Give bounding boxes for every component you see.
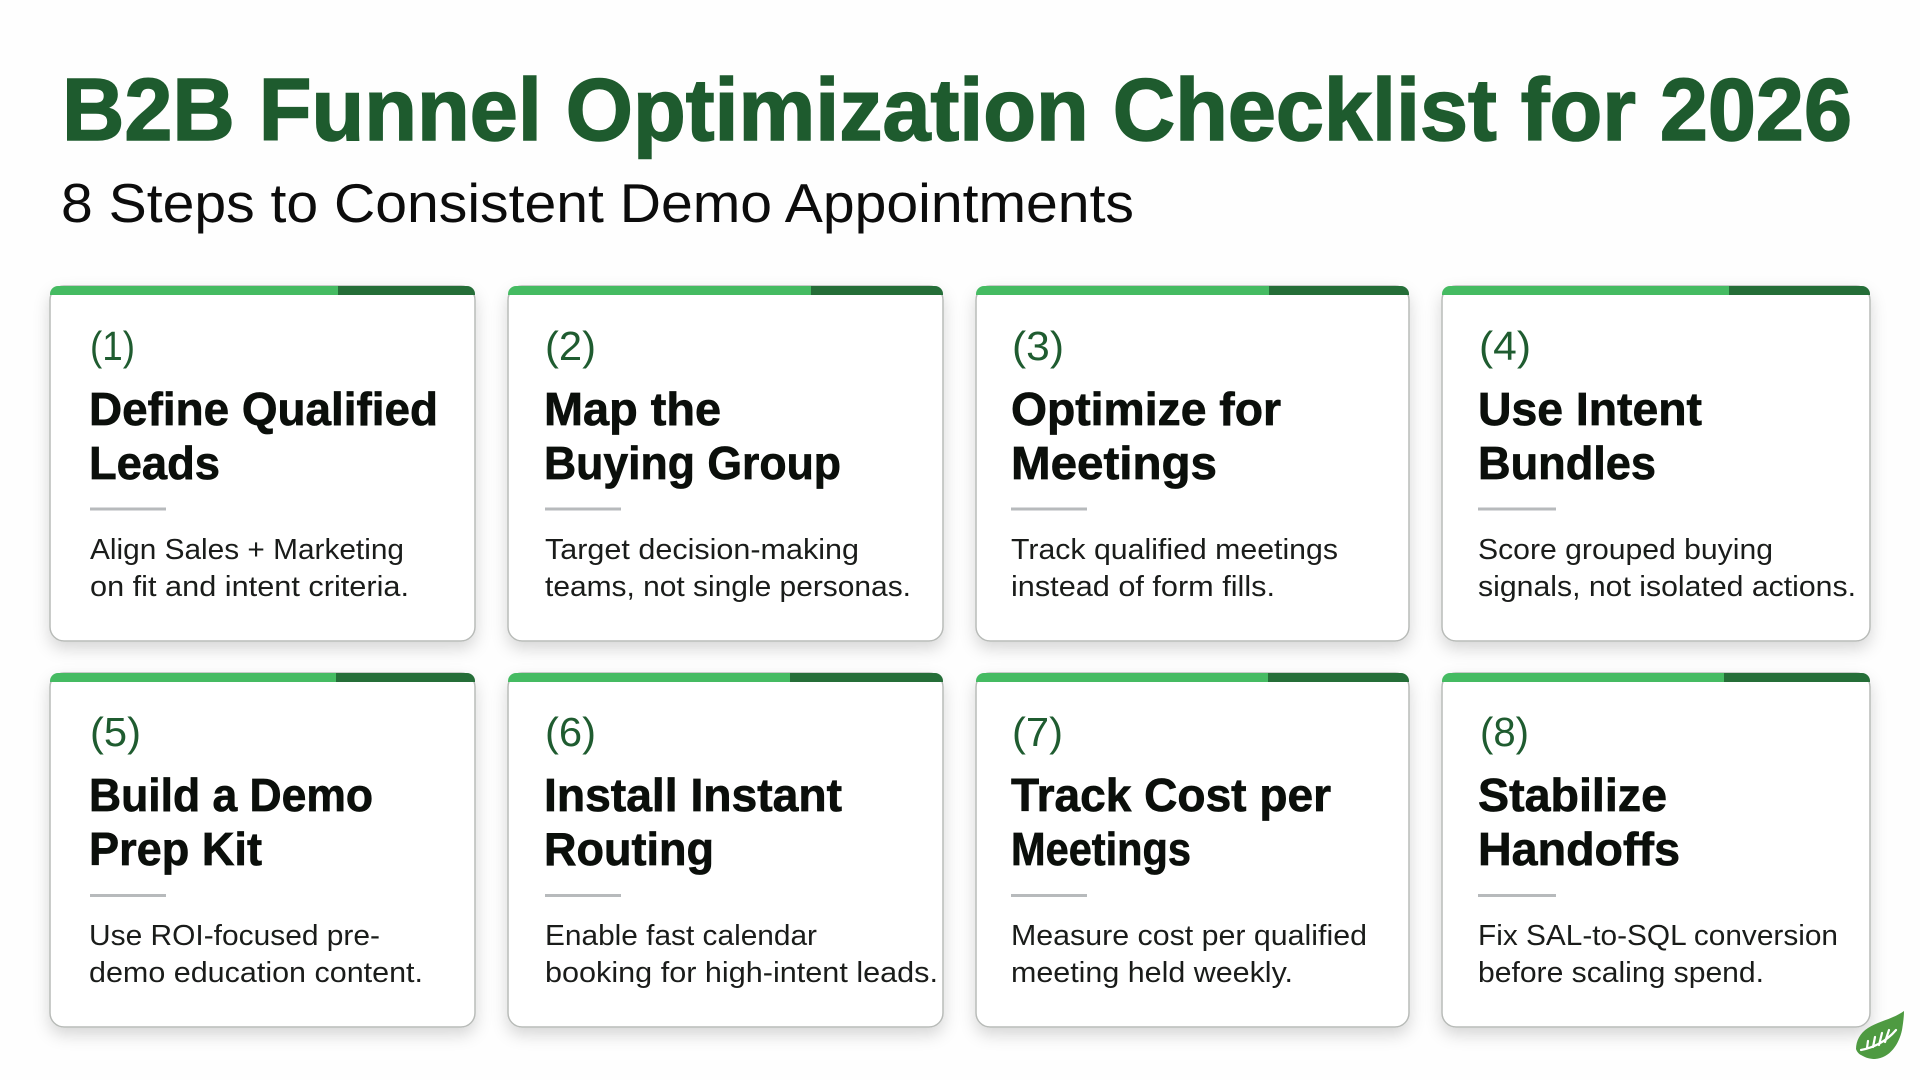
- panel: step 3: Optimize for: [1011, 383, 1281, 435]
- panel: step 1: Align Sales + Marketing: [90, 534, 404, 566]
- panel: step 3: instead of form fills.: [1011, 571, 1275, 603]
- panel: step 8: Fix SAL-to-SQL conversion: [1478, 920, 1838, 952]
- panel: step 3: Meetings: [1011, 437, 1217, 489]
- panel: step 3: Track qualified meetings: [1011, 534, 1338, 566]
- panel: step 4: [1442, 286, 1870, 641]
- panel: step 7: Meetings: [1011, 823, 1191, 875]
- panel: step 4: Bundles: [1478, 437, 1656, 489]
- panel: step 6: Enable fast calendar: [545, 920, 817, 952]
- panel: step 7: meeting held weekly.: [1011, 957, 1293, 989]
- panel: step 5: Prep Kit: [89, 823, 262, 875]
- panel: step 8: before scaling spend.: [1478, 957, 1764, 989]
- panel: step 2: Target decision-making: [545, 534, 859, 566]
- panel: step 2: [508, 286, 943, 641]
- panel: step 6: Routing: [544, 823, 714, 875]
- panel: step 4: Score grouped buying: [1478, 534, 1773, 566]
- panel: step 2: (2): [545, 323, 596, 369]
- panel: step 2: Buying Group: [544, 437, 841, 489]
- subtitle: 8 Steps to Consistent Demo Appointments: [61, 172, 1134, 234]
- panel: step 6: booking for high-intent leads.: [545, 957, 938, 989]
- panel: step 7: [976, 673, 1409, 1027]
- panel: step 6: (6): [545, 709, 596, 755]
- panel: step 6: [508, 673, 943, 1027]
- panel: step 1: Define Qualified: [89, 383, 438, 435]
- panel: step 1: [50, 286, 475, 641]
- panel: step 5: (5): [90, 709, 141, 755]
- panel: step 8: [1442, 673, 1870, 1027]
- panel: step 5: Build a Demo: [89, 769, 373, 821]
- panel: step 3: [976, 286, 1409, 641]
- panel: step 2: Map the: [544, 383, 721, 435]
- panel: step 5: Use ROI-focused pre-: [89, 920, 380, 952]
- panel: step 1: on fit and intent criteria.: [90, 571, 409, 603]
- panel: step 8: Stabilize: [1478, 769, 1667, 821]
- panel: step 7: (7): [1012, 709, 1063, 755]
- panel: step 3: (3): [1012, 323, 1064, 369]
- panel: step 7: Measure cost per qualified: [1011, 920, 1367, 952]
- panel: step 4: (4): [1479, 323, 1531, 369]
- panel: step 4: Use Intent: [1478, 383, 1702, 435]
- panel: step 1: Leads: [89, 437, 220, 489]
- panel: step 5: [50, 673, 475, 1027]
- panel: step 4: signals, not isolated actions.: [1478, 571, 1856, 603]
- panel: step 2: teams, not single personas.: [545, 571, 911, 603]
- panel: step 1: (1): [90, 323, 135, 369]
- icon: leaf logo: [1856, 1011, 1904, 1059]
- panel: step 6: Install Instant: [544, 769, 842, 821]
- panel: step 8: (8): [1480, 709, 1529, 755]
- title: B2B Funnel Optimization Checklist for 2026: [62, 60, 1852, 159]
- panel: step 8: Handoffs: [1478, 823, 1680, 875]
- panel: step 7: Track Cost per: [1011, 769, 1331, 821]
- panel: step 5: demo education content.: [89, 957, 423, 989]
